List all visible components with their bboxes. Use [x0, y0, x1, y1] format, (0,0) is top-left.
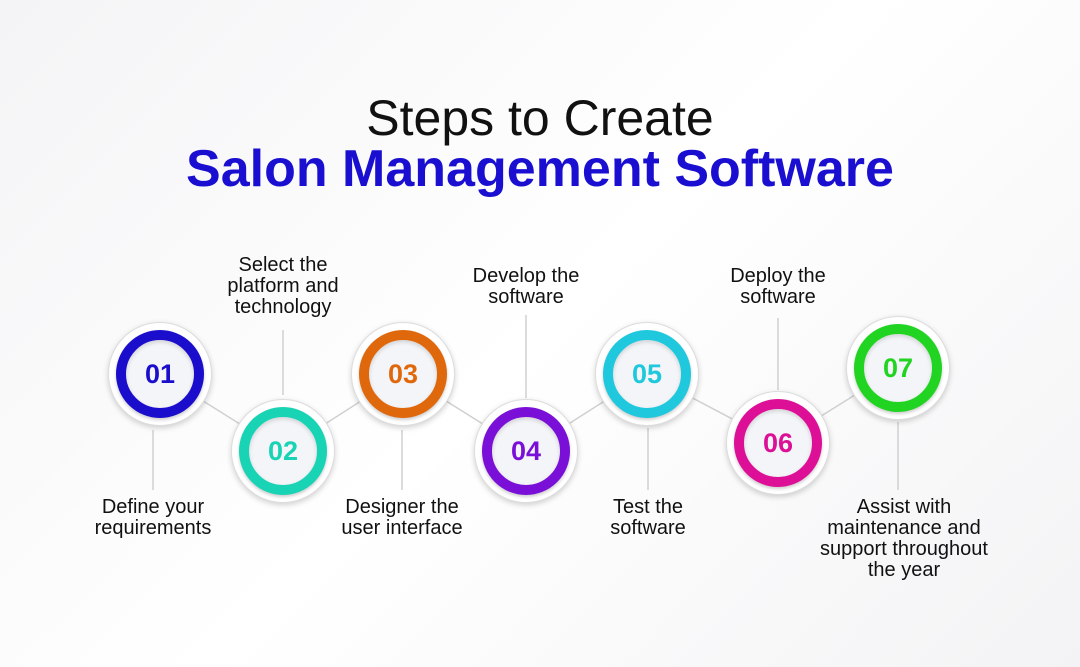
label 03: Designer the [345, 496, 459, 518]
step 03 [351, 322, 455, 426]
label 04 [473, 265, 579, 308]
title [186, 90, 894, 198]
label 01: requirements [95, 517, 211, 539]
label 07: support throughout [820, 538, 988, 560]
label 02: platform and [227, 275, 339, 297]
label 05 [610, 496, 686, 539]
label 03 [341, 496, 463, 539]
label 06: software [740, 286, 816, 308]
label 04: software [488, 286, 564, 308]
step 04 [474, 399, 578, 503]
title: Salon Management Software [186, 140, 894, 198]
label 03: user interface [341, 517, 463, 539]
step 06 [726, 391, 830, 495]
step 06: 06 [763, 428, 793, 458]
step 04: 04 [511, 436, 541, 466]
title: Steps to Create [366, 90, 714, 146]
label 05: Test the [613, 496, 683, 518]
label 07: Assist with [857, 496, 951, 518]
label 05: software [610, 517, 686, 539]
label 06: Deploy the [730, 265, 826, 287]
label 06 [730, 265, 826, 308]
step 01: 01 [145, 358, 175, 388]
label 07 [820, 496, 988, 581]
label 07: maintenance and [827, 517, 981, 539]
label 02: technology [235, 296, 331, 318]
step 01 [108, 322, 212, 426]
label 07: the year [868, 559, 940, 581]
label 02: Select the [239, 254, 327, 276]
step 02 [231, 399, 335, 503]
step 02: 02 [268, 436, 298, 466]
step 05: 05 [632, 358, 662, 388]
step 07 [846, 316, 950, 420]
step 05 [595, 322, 699, 426]
step 03: 03 [388, 358, 418, 388]
label 01: Define your [102, 496, 204, 518]
label 04: Develop the [473, 265, 579, 287]
label 01 [95, 496, 211, 539]
step 07: 07 [883, 352, 913, 382]
label 02 [227, 254, 339, 318]
